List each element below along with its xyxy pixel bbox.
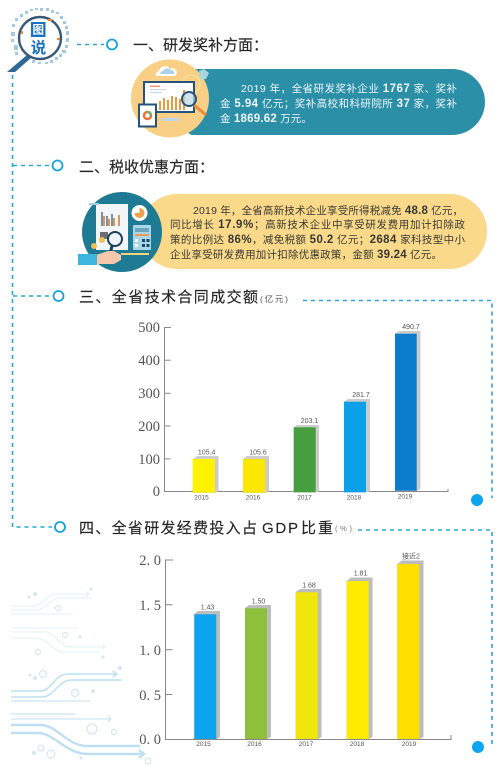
y axis labels: 1. 5 xyxy=(139,598,161,614)
bar 2015: 2015 xyxy=(194,494,209,502)
axes xyxy=(166,560,451,740)
bar 2016: 2016 xyxy=(247,741,262,748)
decoration: flowing arrows xyxy=(11,588,151,764)
logo character 图: 图 xyxy=(32,24,44,37)
bar 2015 xyxy=(194,604,220,748)
bar 2018: 281.7 xyxy=(352,392,370,399)
bar 2015 xyxy=(193,450,218,502)
panel 1 text: 2019 年，全省研发奖补企业 1767 家、奖补 xyxy=(241,82,458,95)
bar 2019: 接近2 xyxy=(402,552,420,560)
section 3 marker xyxy=(54,291,64,301)
heading 4: 比重 xyxy=(301,520,333,537)
bar 2017: 2017 xyxy=(299,741,314,748)
bar 2019 xyxy=(397,552,424,748)
bar 2019: 2019 xyxy=(398,494,413,500)
bar 2016: 105.6 xyxy=(249,450,267,456)
bar chart: technology contract value xyxy=(138,320,448,502)
bar 2018 xyxy=(344,392,370,502)
panel 1 text: 金 5.94 亿元；奖补高校和科研院所 37 家，奖补 xyxy=(220,97,458,110)
logo: magnifier 图说 xyxy=(7,8,69,72)
bar 2019: 490.7 xyxy=(402,324,420,331)
y axis labels: 0. 5 xyxy=(139,688,161,704)
panel 2 text xyxy=(170,204,466,261)
y axis labels: 400 xyxy=(138,353,160,369)
heading 4: GDP xyxy=(262,520,298,537)
bar 2019: 2019 xyxy=(402,741,417,748)
y axis labels: 100 xyxy=(138,452,160,468)
heading 4: 四、全省研发经费投入占 xyxy=(79,519,257,537)
bar 2018 xyxy=(347,570,372,748)
chart 1 end dot xyxy=(471,494,483,506)
bar 2019 xyxy=(395,324,420,500)
heading 4: (%) xyxy=(335,524,352,533)
heading 2: 二、税收优惠方面： xyxy=(79,159,214,176)
y axis labels xyxy=(138,320,160,500)
y axis labels: 1. 0 xyxy=(139,643,161,659)
chart 2 end dot xyxy=(472,741,484,753)
icon: report with calculator xyxy=(78,192,162,272)
logo character 说: 说 xyxy=(31,39,47,57)
bar 2015: 105.4 xyxy=(198,450,216,456)
bar 2016 xyxy=(245,598,271,748)
heading 3: (亿元) xyxy=(260,294,288,304)
panel 1: R&D subsidy xyxy=(131,60,485,138)
bar 2015: 2015 xyxy=(196,741,211,748)
bar 2016 xyxy=(243,450,269,502)
heading 1: 一、研发奖补方面： xyxy=(133,37,268,54)
y axis labels: 0 xyxy=(153,484,160,500)
panel 2: tax incentives xyxy=(78,192,487,272)
panel 2 text: 同比增长 17.9%；高新技术企业中享受研发费用加计扣除政 xyxy=(170,218,466,231)
bar 2017: 2017 xyxy=(297,494,312,502)
bar 2017 xyxy=(294,418,319,502)
section 1 marker xyxy=(107,40,117,50)
bar chart: R&D spending as share of GDP xyxy=(139,552,451,748)
y axis labels: 500 xyxy=(138,320,160,336)
panel 2 text: 企业享受研发费用加计扣除优惠政策，金额 39.24 亿元。 xyxy=(170,248,442,261)
panel 1 text: 金 1869.62 万元。 xyxy=(220,112,312,125)
y axis labels xyxy=(139,553,161,748)
icon: analytics monitor xyxy=(131,60,209,138)
bar 2015: 1.43 xyxy=(201,604,214,612)
bar 2016: 2016 xyxy=(246,494,261,502)
bar 2018: 2018 xyxy=(350,741,365,748)
panel 2 text: 2019 年，全省高新技术企业享受所得税减免 48.8 亿元， xyxy=(193,204,463,217)
bar 2017 xyxy=(296,582,322,748)
section 4 marker xyxy=(55,522,65,532)
bar 2017: 1.68 xyxy=(302,582,316,590)
axes xyxy=(164,328,448,492)
panel 1 text xyxy=(220,82,458,125)
heading 4 xyxy=(79,519,352,537)
panel 2 text: 策的比例达 86%，减免税额 50.2 亿元；2684 家科技型中小 xyxy=(170,233,466,246)
bar 2018: 2018 xyxy=(347,494,362,502)
bar 2016: 1.50 xyxy=(252,598,265,606)
y axis labels: 300 xyxy=(138,386,160,402)
section 2 marker xyxy=(52,160,62,170)
heading 3: 三、全省技术合同成交额 xyxy=(79,288,258,306)
y axis labels: 2. 0 xyxy=(139,553,161,569)
y axis labels: 200 xyxy=(138,419,160,435)
bar 2017: 203.1 xyxy=(301,418,318,425)
bar 2018: 1.81 xyxy=(354,570,367,578)
y axis labels: 0. 0 xyxy=(139,732,161,748)
